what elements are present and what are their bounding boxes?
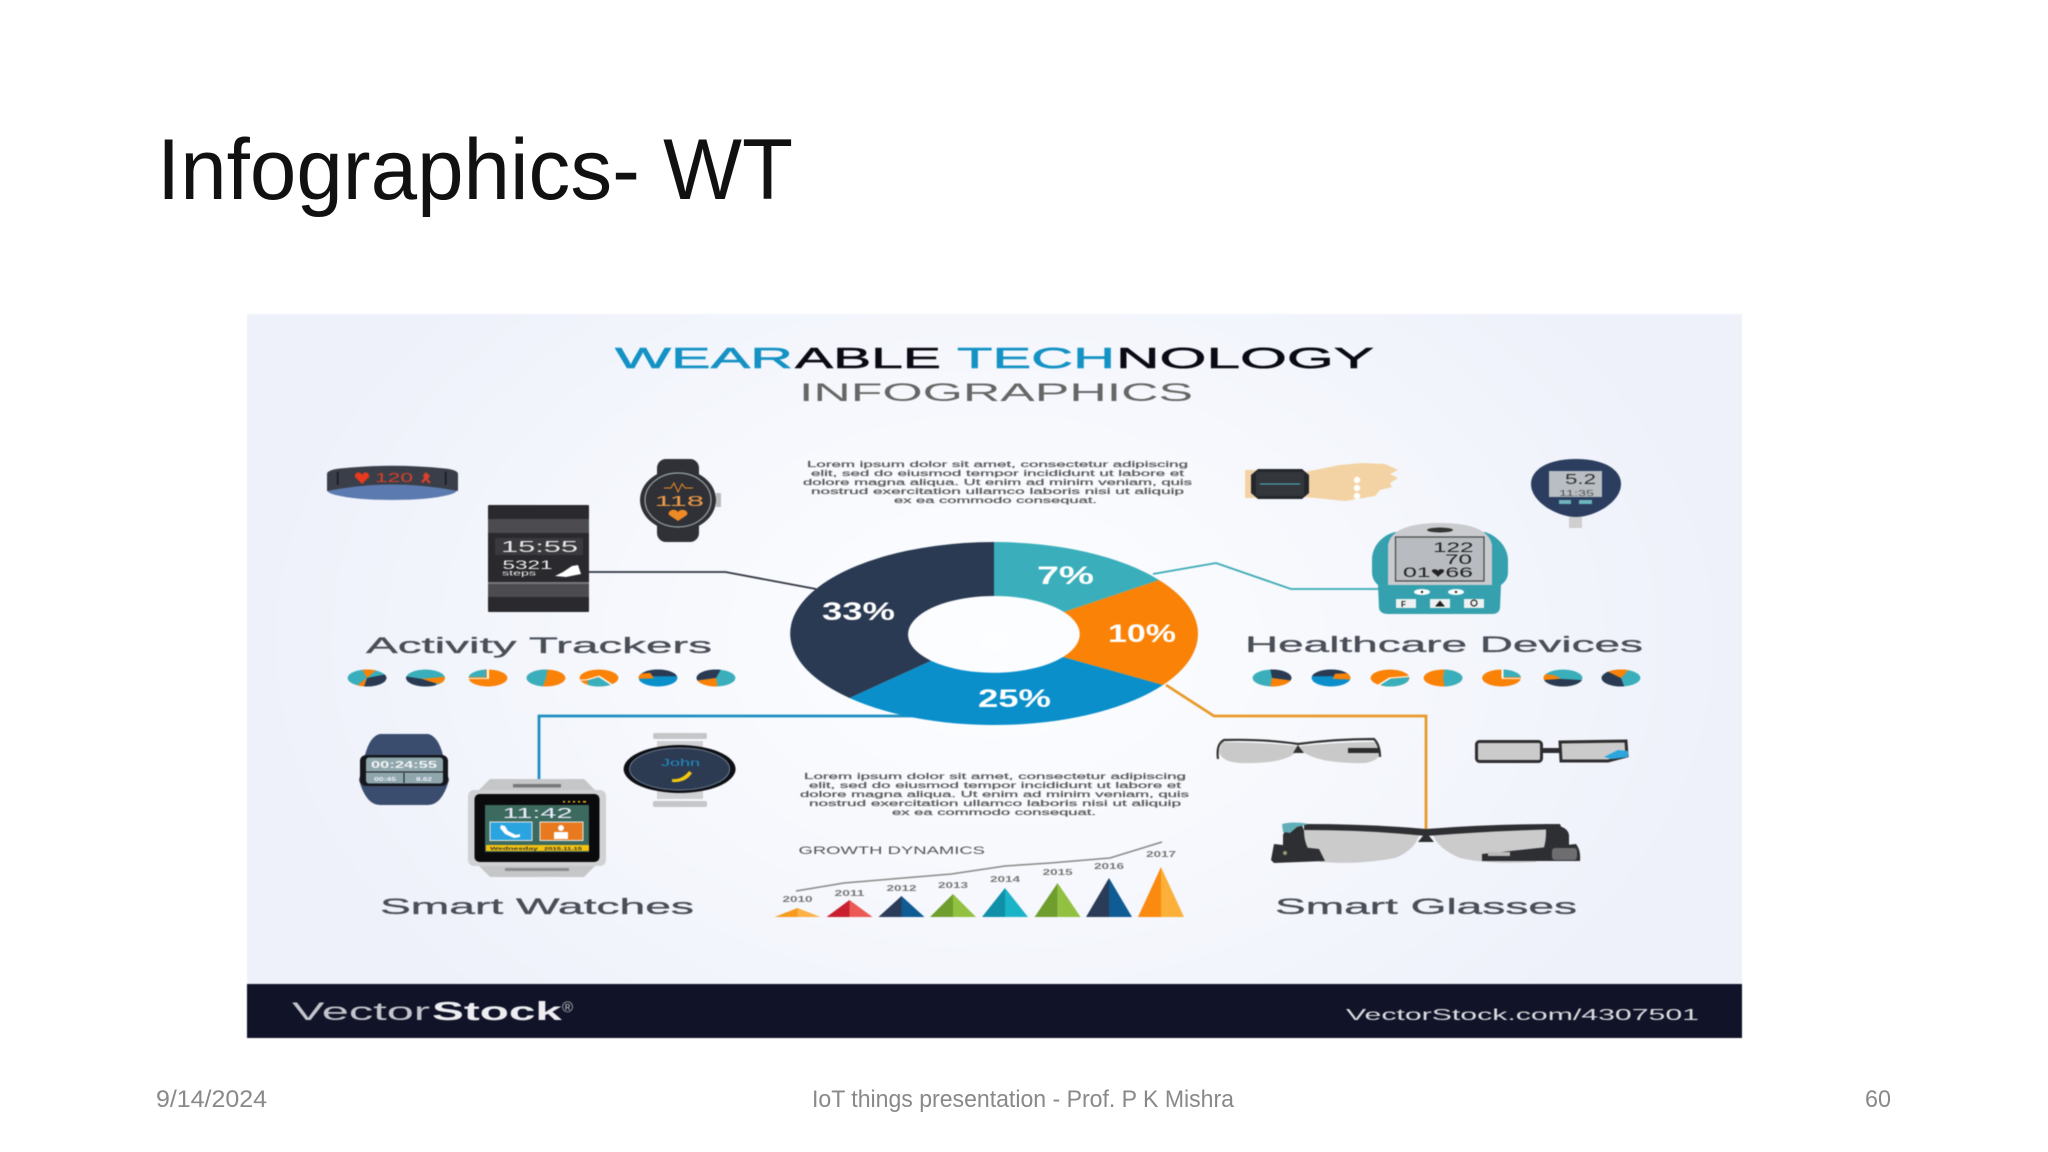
segment: 7% <box>994 542 1159 612</box>
text block: lower lorem ipsum: Lorem ipsum dolor sit amet, consectetur adipiscing <box>804 771 1186 781</box>
icon: smart glasses right <box>1476 741 1628 762</box>
footer bar: vectorstock: Stock <box>432 996 563 1026</box>
footer bar: vectorstock: ® <box>562 999 573 1016</box>
icon: blood pressure monitor: F <box>1401 600 1406 609</box>
icon: blood pressure monitor: 70 <box>1445 551 1472 567</box>
icon: call watch <box>624 733 736 807</box>
infographic heading: ABLE <box>795 343 941 375</box>
text block: upper lorem ipsum: ex ea commodo consequat. <box>894 495 1097 505</box>
icon: blood pressure monitor: 01♥66 <box>1403 564 1473 580</box>
percentage labels: 25% <box>978 685 1051 713</box>
icon: wrist band on hand <box>1245 463 1398 501</box>
pyramids <box>774 867 1184 917</box>
segment: 25% <box>850 657 1163 725</box>
icon: stopwatch band: 8.62 <box>416 777 432 783</box>
text block: lower lorem ipsum <box>800 771 1189 817</box>
percentage labels: 7% <box>1037 562 1094 590</box>
footer bar: vectorstock: Vector <box>292 998 430 1026</box>
heading: Activity Trackers: Activity Trackers <box>366 633 712 658</box>
year labels: 2011 <box>834 889 865 898</box>
connector: healthcare devices <box>1153 563 1380 589</box>
icon: glucose meter <box>1531 459 1621 528</box>
icon: stopwatch band: 00:45 <box>374 777 396 783</box>
text block: lower lorem ipsum: ex ea commodo consequat. <box>892 807 1096 817</box>
icon: smart glasses left <box>1218 739 1380 763</box>
icon: activity tracker: steps <box>502 570 537 578</box>
year labels: 2016 <box>1094 862 1125 871</box>
slide title: Infographics- WT <box>157 122 793 218</box>
infographic heading: NOLOGY <box>1116 343 1374 375</box>
year labels: 2017 <box>1146 850 1177 859</box>
footer: page number: 60 <box>1865 1086 1891 1113</box>
year labels <box>782 850 1177 904</box>
icon: smart watch: 2015.11.15 <box>544 846 583 851</box>
chart title: GROWTH DYNAMICS <box>798 845 985 857</box>
icon: fitness band: 120 <box>375 470 413 485</box>
text block: upper lorem ipsum: nostrud exercitation ullamco laboris nisi ut aliquip <box>811 486 1184 496</box>
text block: upper lorem ipsum: dolore magna aliqua. Ut enim ad minim veniam, quis <box>803 477 1192 487</box>
segment: 33% <box>790 542 994 698</box>
panel: infographic image <box>247 314 1742 1038</box>
year labels: 2012 <box>886 884 917 893</box>
year labels: 2015 <box>1043 868 1074 877</box>
text block: upper lorem ipsum: Lorem ipsum dolor sit amet, consectetur adipiscing <box>807 459 1188 469</box>
connector: smart glasses <box>1166 685 1426 830</box>
icon: heart rate watch: 118 <box>655 493 704 510</box>
heading: Smart Watches: Smart Watches <box>380 894 694 919</box>
icon: call watch: John <box>661 758 700 769</box>
footer bar: vectorstock <box>247 984 1742 1038</box>
text block: lower lorem ipsum: nostrud exercitation ullamco laboris nisi ut aliquip <box>809 798 1181 808</box>
infographic heading <box>615 343 1374 407</box>
footer bar: vectorstock: VectorStock.com/4307501 <box>1346 1007 1699 1024</box>
icon: fitness band <box>327 466 458 500</box>
trend line <box>796 842 1162 891</box>
icon: stopwatch band: 00:24:55 <box>371 760 438 771</box>
donut chart <box>790 542 1198 725</box>
year labels: 2014 <box>990 875 1021 884</box>
year labels: 2013 <box>938 881 969 890</box>
heading: Healthcare Devices: Healthcare Devices <box>1245 632 1643 657</box>
icon: smart watch: 11:42 <box>502 805 572 822</box>
icon: activity tracker <box>488 505 589 612</box>
icon: smart watch <box>468 779 606 877</box>
infographic heading: TECH <box>957 343 1115 375</box>
icon: activity tracker: 15:55 <box>501 539 578 556</box>
connector: activity trackers <box>589 572 816 589</box>
footer: date: 9/14/2024 <box>156 1086 267 1113</box>
icon: smart watch: Wednesday <box>490 846 539 851</box>
infographic heading: INFOGRAPHICS <box>799 379 1193 407</box>
icon: stopwatch band <box>359 734 449 805</box>
percentage labels: 33% <box>822 598 895 626</box>
icon: glucose meter: 11:35 <box>1559 489 1595 498</box>
icon: blood pressure monitor: 122 <box>1433 539 1474 555</box>
icon: glucose meter: 5.2 <box>1565 471 1596 488</box>
icon: blood pressure monitor <box>1372 523 1508 614</box>
heading: Smart Glasses: Smart Glasses <box>1275 894 1577 919</box>
text block: upper lorem ipsum: elit, sed do eiusmod tempor incididunt ut labore et <box>811 468 1185 478</box>
icon: smart glasses large <box>1271 822 1580 863</box>
text block: lower lorem ipsum: elit, sed do eiusmod tempor incididunt ut labore et <box>809 780 1182 790</box>
text block: lower lorem ipsum: dolore magna aliqua. Ut enim ad minim veniam, quis <box>800 789 1189 799</box>
segment: 10% <box>1063 580 1198 685</box>
footer: presentation name: IoT things presentation - Prof. P K Mishra <box>812 1086 1235 1113</box>
percentage labels: 10% <box>1108 620 1176 648</box>
text block: upper lorem ipsum <box>803 459 1192 505</box>
mini pies: activity trackers <box>346 668 736 688</box>
mini pies: healthcare devices <box>1252 668 1642 688</box>
chart: growth dynamics <box>774 842 1184 917</box>
infographic heading: WEAR <box>615 343 793 375</box>
icon: heart rate watch <box>640 459 721 542</box>
percentage labels <box>822 562 1176 713</box>
connector: smart watches <box>539 716 915 780</box>
year labels: 2010 <box>782 895 813 904</box>
icon: activity tracker: 5321 <box>502 558 553 572</box>
